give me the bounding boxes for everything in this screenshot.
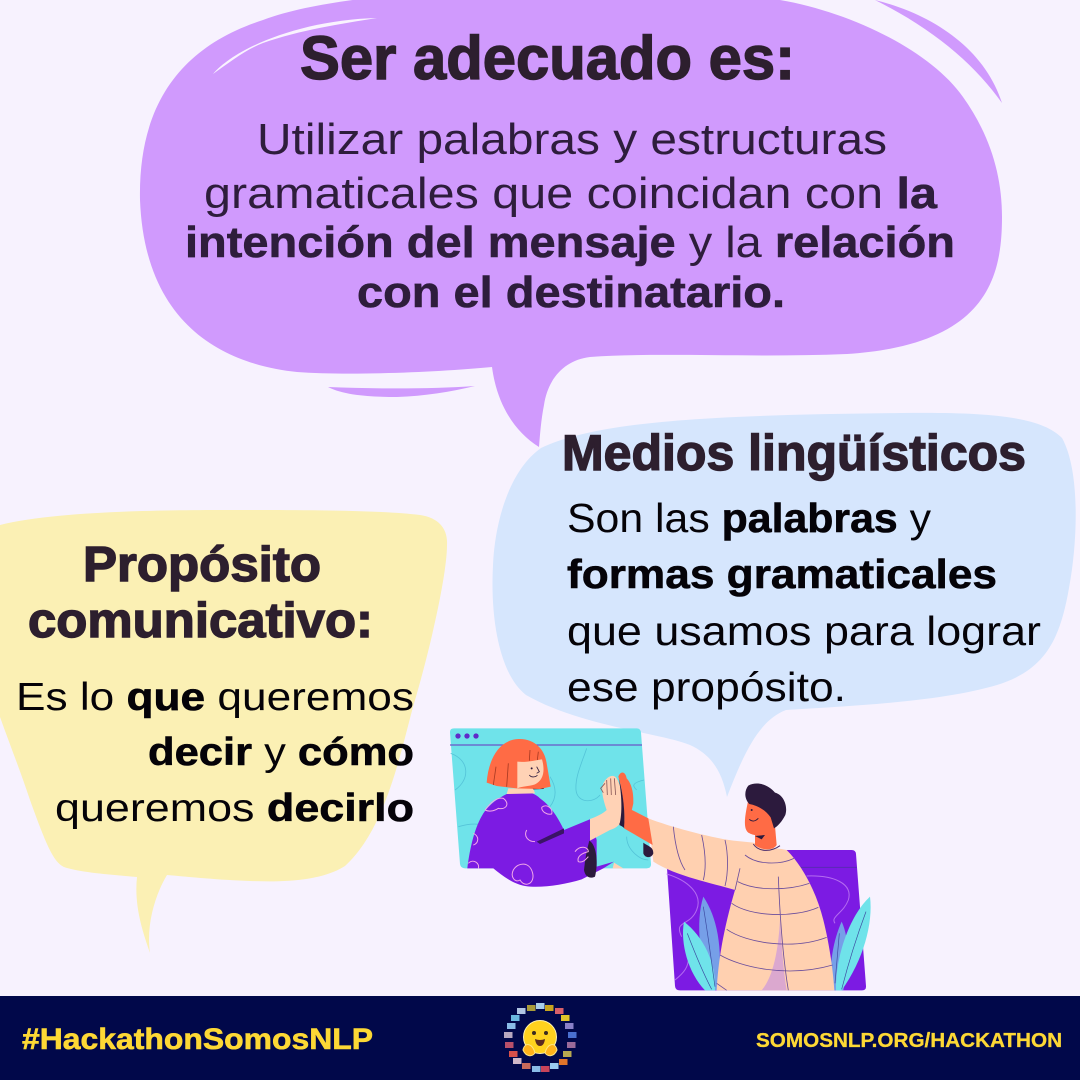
man: cuff and forearm (618, 772, 653, 857)
text block: propósito definition: decir y cómo (148, 731, 414, 774)
text block: definition: gramaticales que coincidan con la (204, 169, 938, 218)
man: sweater (648, 818, 834, 990)
footer: url: SOMOSNLP.ORG/HACKATHON (756, 1030, 1062, 1052)
heading: Propósito comunicativo: Propósito (83, 538, 321, 592)
man: right plants (831, 922, 847, 990)
swoosh: white highlight (213, 18, 377, 74)
man: head (745, 784, 786, 850)
text block: definition (185, 115, 955, 317)
plant: right front leaf (835, 897, 871, 990)
panel: blue speech bubble (492, 413, 1076, 797)
window: teal video window (450, 728, 651, 868)
swoosh: purple lower stroke (328, 386, 475, 397)
text block: definition: Utilizar palabras y estructuras (257, 115, 887, 164)
footer: hashtag: #HackathonSomosNLP (22, 1023, 373, 1056)
window: purple back window (666, 850, 866, 990)
text block: medios definition (567, 495, 1041, 710)
woman: arm and hand (590, 776, 626, 868)
text block: propósito definition (16, 676, 414, 830)
heading: Propósito comunicativo: comunicativo: (28, 594, 373, 648)
heading: Propósito comunicativo (28, 538, 373, 648)
text block: propósito definition: queremos decirlo (55, 787, 414, 830)
swoosh: purple top right arc (875, 0, 1002, 103)
heading: Ser adecuado es: Ser adecuado es: (300, 24, 795, 92)
text block: definition: intención del mensaje y la relación (185, 218, 955, 267)
woman: purple sweater (467, 791, 614, 887)
text block: propósito definition: Es lo que queremos (16, 676, 414, 719)
panel: purple speech bubble (140, 0, 1002, 447)
text block: definition: con el destinatario. (357, 268, 785, 317)
panel: yellow speech bubble (0, 510, 447, 953)
text block: medios definition: ese propósito. (567, 664, 846, 710)
text block: medios definition: formas gramaticales (567, 551, 997, 597)
logo: flags ring with hugging face (504, 1003, 576, 1072)
illustration: high five video call (450, 728, 871, 990)
heading: Medios lingüísticos: Medios lingüísticos (562, 425, 1026, 481)
plant: left leaves (683, 897, 720, 990)
text block: medios definition: Son las palabras y (567, 495, 932, 541)
text block: medios definition: que usamos para lograr (567, 608, 1041, 654)
woman: head and hair (487, 739, 551, 794)
footer band (0, 996, 1080, 1080)
